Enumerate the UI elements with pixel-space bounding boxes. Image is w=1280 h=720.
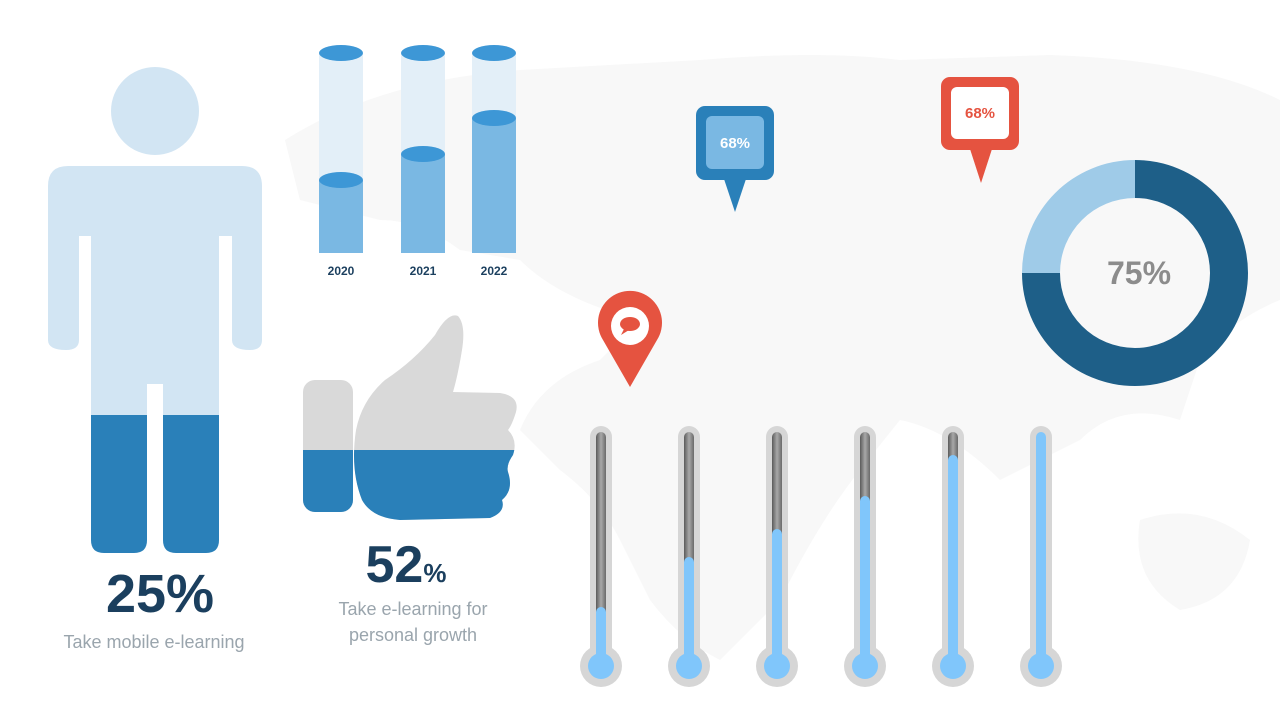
person icon [48,67,262,553]
thumbs up icon [303,315,517,520]
stat: 25% [63,564,245,652]
stat: 52%: 52% [366,536,446,594]
callout: blue 68%: 68% [720,135,750,152]
world map background [285,55,1280,660]
stat: 25%: 25% [106,564,214,624]
stat: 25%: Take mobile e-learning [63,632,245,652]
cylinder bar chart: 2022 [481,264,508,278]
thermometers [580,426,1062,687]
donut chart 75% [1022,160,1248,386]
callout: blue 68% [696,106,774,212]
callout: red 68% [941,77,1019,183]
stat: 52%: personal growth [349,625,477,645]
stat: 52% [338,536,488,645]
cylinder bar chart: 2021 [410,264,437,278]
stat: 52%: Take e-learning for [338,599,488,619]
cylinder bar chart: 2020 [328,264,355,278]
donut chart 75%: 75% [1107,255,1171,291]
pin: chat marker [598,291,662,387]
callout: red 68%: 68% [965,105,995,122]
cylinder bar chart [319,45,516,278]
